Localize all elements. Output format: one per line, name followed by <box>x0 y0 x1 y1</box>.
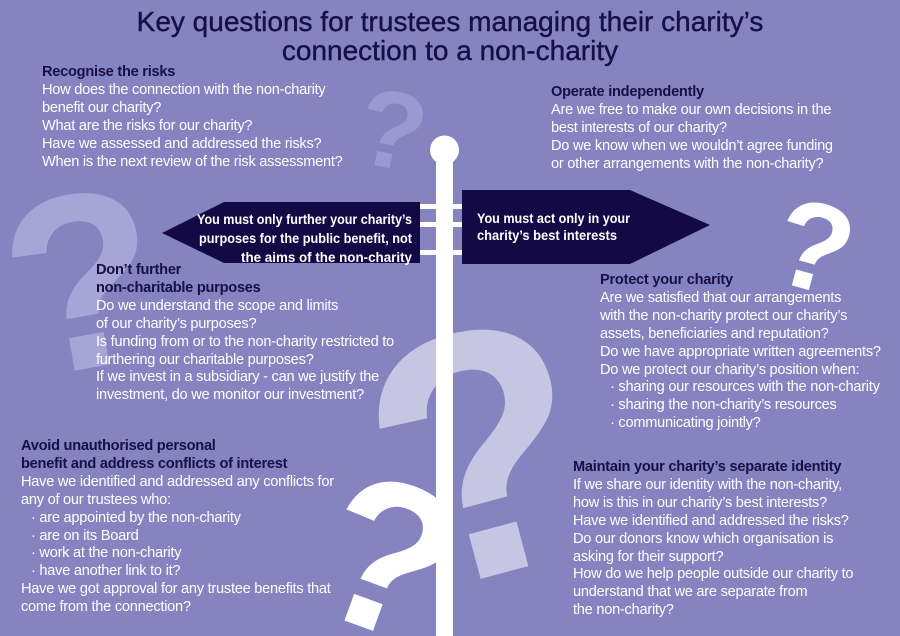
title <box>137 6 763 66</box>
text block: protect your charity: · sharing the non-charity’s resources <box>610 397 837 413</box>
text block: recognise the risks <box>42 64 343 170</box>
text block: protect your charity: Do we have appropriate written agreements? <box>600 344 881 360</box>
text block: avoid unauthorised personal benefit: Have we identified and addressed any conflicts for <box>21 474 334 490</box>
sign: right arrow <box>462 190 710 264</box>
text block: maintain separate identity: asking for their support? <box>573 549 723 565</box>
sign: left arrow: the aims of the non-charity <box>241 249 412 265</box>
text block: avoid unauthorised personal benefit: come from the connection? <box>21 599 191 615</box>
text block: maintain separate identity: how is this in our charity’s best interests? <box>573 495 827 511</box>
text block: protect your charity: Are we satisfied that our arrangements <box>600 290 841 306</box>
text block: operate independently <box>551 84 833 172</box>
text block: maintain separate identity: understand that we are separate from <box>573 584 807 600</box>
sign: left arrow <box>162 202 420 265</box>
sign: left arrow: You must only further your charity’s <box>197 211 412 227</box>
text block: don't further non-charitable purposes: If we invest in a subsidiary - can we justify the <box>96 369 379 385</box>
text block: avoid unauthorised personal benefit: · are on its Board <box>31 528 138 544</box>
text block: don't further non-charitable purposes: Do we understand the scope and limits <box>96 298 338 314</box>
text block: avoid unauthorised personal benefit: benefit and address conflicts of interest <box>21 456 287 472</box>
text block: maintain separate identity: the non-charity? <box>573 602 674 618</box>
text block: avoid unauthorised personal benefit: · are appointed by the non-charity <box>31 510 241 526</box>
text block: maintain separate identity: Have we identified and addressed the risks? <box>573 513 849 529</box>
text block: maintain separate identity <box>573 459 853 618</box>
text block: don't further non-charitable purposes: Is funding from or to the non-charity restricted to <box>96 334 394 350</box>
text block: don't further non-charitable purposes: Don’t further <box>96 262 181 278</box>
sign: right arrow: You must act only in your <box>477 210 630 226</box>
text block: protect your charity: · sharing our resources with the non-charity <box>610 379 880 395</box>
text block: avoid unauthorised personal benefit: · have another link to it? <box>31 563 180 579</box>
text block: protect your charity: Protect your charity <box>600 272 733 288</box>
sign: left arrow: purposes for the public benefit, not <box>199 230 412 246</box>
text block: avoid unauthorised personal benefit: any of our trustees who: Have we got approval for any trustee benefits that <box>21 492 331 597</box>
text block: protect your charity: with the non-charity protect our charity’s <box>600 308 847 324</box>
text block: avoid unauthorised personal benefit: Avoid unauthorised personal <box>21 438 216 454</box>
title: connection to a non-charity <box>282 35 618 66</box>
signpost pole <box>418 136 463 636</box>
text block: don't further non-charitable purposes: non-charitable purposes <box>96 280 261 296</box>
text block: don't further non-charitable purposes: furthering our charitable purposes? <box>96 352 314 368</box>
text block: recognise the risks: When is the next review of the risk assessment? <box>42 154 343 170</box>
title: Key questions for trustees managing their charity’s <box>137 6 763 37</box>
text block: recognise the risks: Recognise the risks <box>42 64 175 80</box>
text block: protect your charity: Do we protect our charity’s position when: <box>600 362 859 378</box>
text block: protect your charity <box>600 272 881 431</box>
text block: maintain separate identity: How do we help people outside our charity to <box>573 566 853 582</box>
text block: avoid unauthorised personal benefit: · work at the non-charity <box>31 545 181 561</box>
icon: right white question mark: ? <box>759 170 869 324</box>
text block: don't further non-charitable purposes <box>96 262 394 403</box>
text block: recognise the risks: What are the risks for our charity? <box>42 118 252 134</box>
text block: avoid unauthorised personal benefit <box>21 438 334 615</box>
text block: don't further non-charitable purposes: investment, do we monitor our investment? <box>96 387 364 403</box>
text block: protect your charity: assets, beneficiaries and reputation? <box>600 326 828 342</box>
sign: right arrow: charity’s best interests <box>477 227 617 243</box>
text block: operate independently: Do we know when we wouldn’t agree funding <box>551 138 833 154</box>
text block: maintain separate identity: If we share our identity with the non-charity, <box>573 477 842 493</box>
text block: operate independently: Operate independently <box>551 84 704 100</box>
text block: protect your charity: · communicating jointly? <box>610 415 761 431</box>
text block: maintain separate identity: Maintain your charity’s separate identity <box>573 459 841 475</box>
text block: operate independently: best interests of our charity? <box>551 120 727 136</box>
text block: operate independently: Are we free to make our own decisions in the <box>551 102 831 118</box>
text block: recognise the risks: How does the connection with the non-charity <box>42 82 325 98</box>
text block: recognise the risks: benefit our charity? <box>42 100 161 116</box>
text block: maintain separate identity: Do our donors know which organisation is <box>573 531 833 547</box>
text block: operate independently: or other arrangements with the non-charity? <box>551 156 823 172</box>
text block: don't further non-charitable purposes: of our charity’s purposes? <box>96 316 256 332</box>
icon: faint question mark top: ? <box>346 63 438 198</box>
text block: recognise the risks: Have we assessed and addressed the risks? <box>42 136 321 152</box>
